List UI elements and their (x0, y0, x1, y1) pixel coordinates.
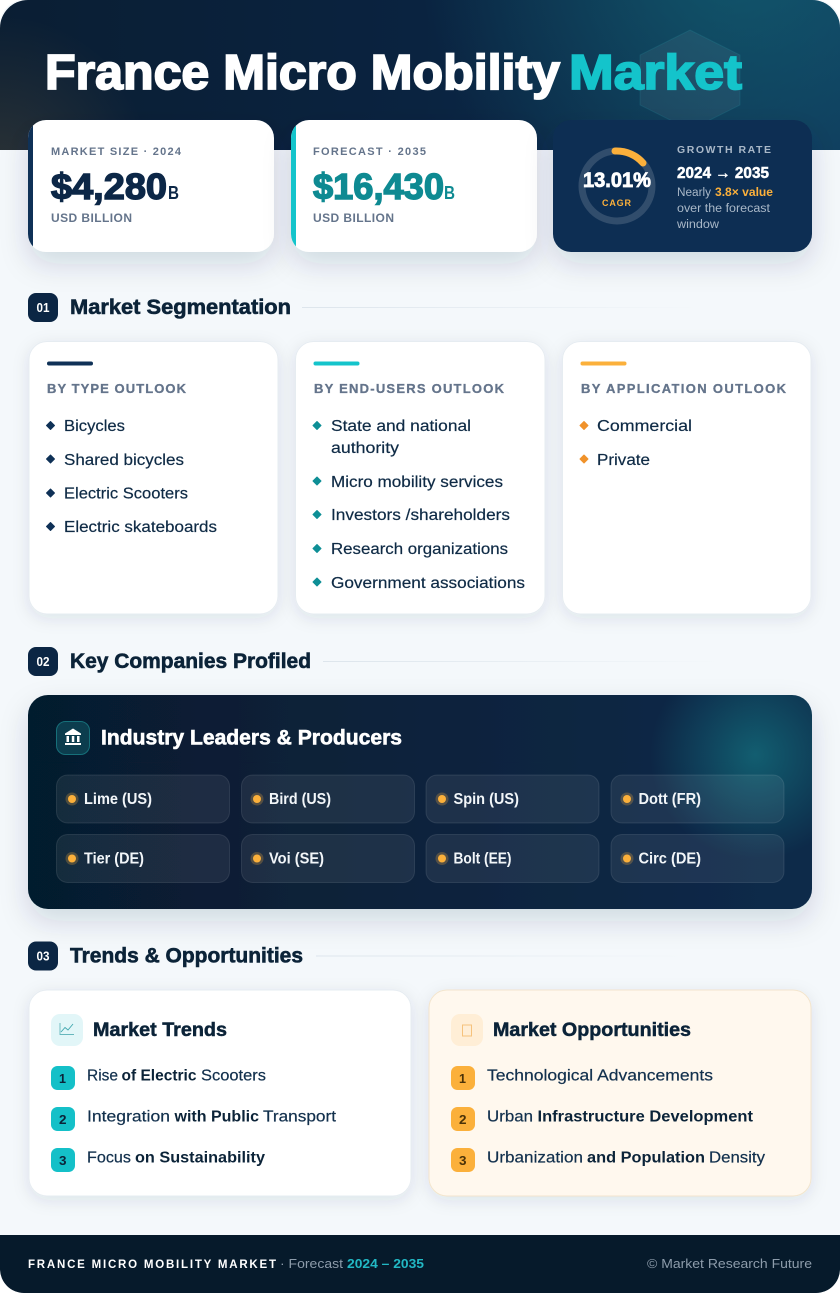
list: application items: Commercial (597, 418, 692, 435)
growth rate text (676, 144, 773, 231)
panel: by application outlook (562, 342, 811, 614)
company chip: Bolt: Bolt (EE) (454, 850, 512, 868)
opportunity 3 (451, 1148, 765, 1172)
panel: by type outlook: BY TYPE OUTLOOK (47, 381, 187, 396)
growth rate text: 2024 → 2035 (677, 165, 769, 182)
company chip: Tier: Tier (DE) (84, 850, 144, 868)
panel: market trends (29, 990, 411, 1196)
section heading: key companies (28, 647, 723, 676)
opportunity 3: and Population (587, 1150, 705, 1166)
list: application items: Private (597, 452, 650, 469)
trend 1: 1 (59, 1071, 66, 1086)
company chip: Dott: Dott (FR) (638, 791, 701, 808)
section heading: market segmentation: Market Segmentation (70, 295, 291, 319)
opportunity 2: Urban (487, 1108, 533, 1126)
opportunity 3: Density (709, 1150, 765, 1166)
trend 3 (51, 1148, 265, 1172)
company chip: Tier (56, 834, 230, 882)
icon: line chart (51, 1014, 83, 1046)
company chip: Voi: Voi (SE) (269, 850, 324, 868)
growth rate text: Nearly (677, 187, 711, 199)
list: type items: Bicycles (64, 418, 125, 435)
company chip: Lime (56, 775, 230, 823)
section heading: market segmentation: 01 (36, 300, 50, 315)
list: type items (46, 418, 217, 536)
section heading: trends and opportunities: Trends & Opportunities (70, 944, 303, 968)
company chip: Lime: Lime (US) (84, 791, 152, 808)
list: type items: Electric skateboards (64, 519, 217, 536)
panel: by type outlook (29, 342, 278, 614)
company chip: Spin (426, 775, 599, 823)
opportunity 1: 1 (459, 1071, 466, 1086)
icon: bank (56, 722, 90, 754)
trend 1: of Electric (122, 1068, 197, 1084)
list: end-user items (313, 418, 525, 592)
opportunity 1 (451, 1066, 713, 1090)
panel: market opportunities: Market Opportunities (493, 1019, 691, 1041)
company chip: Dott (611, 775, 784, 823)
company chip: Bolt (426, 834, 599, 882)
list: end-user items: Investors /shareholders (331, 507, 510, 524)
section heading: key companies: 02 (36, 654, 50, 669)
footer: FRANCE MICRO MOBILITY MARKET (28, 1259, 276, 1271)
header banner (0, 0, 840, 150)
trend 2: Transport (263, 1108, 337, 1126)
stat card: forecast 2035: $16,430 (313, 166, 444, 207)
title: France Micro Mobility (45, 46, 560, 100)
list: end-user items: State and national (331, 418, 471, 435)
panel: industry leaders: Industry Leaders & Producers (101, 726, 402, 750)
list: type items: Electric Scooters (64, 486, 188, 502)
stat card: CAGR growth rate (553, 120, 812, 252)
company chip: Voi (242, 834, 414, 882)
section heading: market segmentation (28, 293, 702, 322)
panel: market opportunities (429, 990, 811, 1196)
trend 3: Focus (87, 1150, 131, 1166)
footer (0, 1235, 840, 1293)
opportunity 3: 3 (459, 1153, 466, 1168)
icon: missing glyph box (451, 1014, 483, 1046)
section heading: trends and opportunities (28, 942, 696, 970)
stat card: market size 2024: MARKET SIZE · 2024 (51, 146, 182, 158)
list: end-user items: Research organizations (331, 541, 508, 558)
growth rate text: over the forecast (677, 203, 771, 215)
stat card: forecast 2035: B (444, 183, 455, 203)
section heading: key companies: Key Companies Profiled (70, 649, 311, 673)
panel: industry leaders (28, 695, 812, 909)
trend 2 (51, 1107, 337, 1131)
opportunity 2 (451, 1107, 753, 1131)
trend 3: on Sustainability (135, 1150, 265, 1166)
trend 3: 3 (59, 1153, 66, 1168)
company chip: Spin: Spin (US) (454, 791, 519, 808)
company chip: Bird: Bird (US) (269, 791, 331, 808)
footer: © Market Research Future (647, 1257, 812, 1271)
panel: market trends: Market Trends (93, 1019, 227, 1041)
company chip: Circ: Circ (DE) (638, 850, 701, 868)
stat card: market size 2024: $4,280 (51, 166, 167, 207)
company chip: Bird (242, 775, 414, 823)
section heading: trends and opportunities: 03 (36, 948, 50, 964)
list: end-user items: authority (331, 440, 399, 457)
stat card: forecast 2035: FORECAST · 2035 (313, 146, 426, 158)
opportunity 2: 2 (459, 1112, 466, 1127)
stat card: market size 2024: USD BILLION (51, 211, 132, 225)
trend 1: Rise (87, 1068, 118, 1084)
footer: 2024 – 2035 (347, 1257, 424, 1271)
footer: · Forecast (280, 1257, 344, 1271)
trend 2: with Public (173, 1108, 259, 1126)
CAGR ring gauge: CAGR (602, 198, 632, 208)
list: application items (580, 418, 692, 469)
panel: by application outlook: BY APPLICATION OUTLOOK (581, 381, 787, 396)
company chip: Circ (611, 834, 784, 882)
stat card: market size 2024 (28, 120, 274, 252)
opportunity 1: Technological Advancements (487, 1068, 713, 1084)
title: Market (569, 46, 742, 100)
list: end-user items: Government associations (331, 575, 525, 592)
trend 1: Scooters (201, 1068, 266, 1084)
stat card: market size 2024: B (168, 183, 179, 203)
stat card: forecast 2035: USD BILLION (313, 211, 394, 225)
growth rate text: window (676, 219, 720, 231)
panel: by end-users outlook (296, 342, 545, 614)
panel: by end-users outlook: BY END-USERS OUTLOOK (314, 381, 505, 396)
trend 1 (51, 1066, 266, 1090)
growth rate text: GROWTH RATE (677, 144, 771, 156)
CAGR ring gauge (582, 151, 652, 221)
CAGR ring gauge: 13.01% (583, 169, 651, 192)
trend 2: 2 (59, 1112, 66, 1127)
list: end-user items: Micro mobility services (331, 474, 503, 491)
opportunity 2: Infrastructure Development (538, 1108, 753, 1126)
growth rate text: 3.8× value (715, 187, 773, 199)
list: type items: Shared bicycles (64, 452, 184, 469)
trend 2: Integration (87, 1108, 170, 1126)
opportunity 3: Urbanization (487, 1150, 583, 1166)
stat card: forecast 2035 (291, 120, 537, 252)
